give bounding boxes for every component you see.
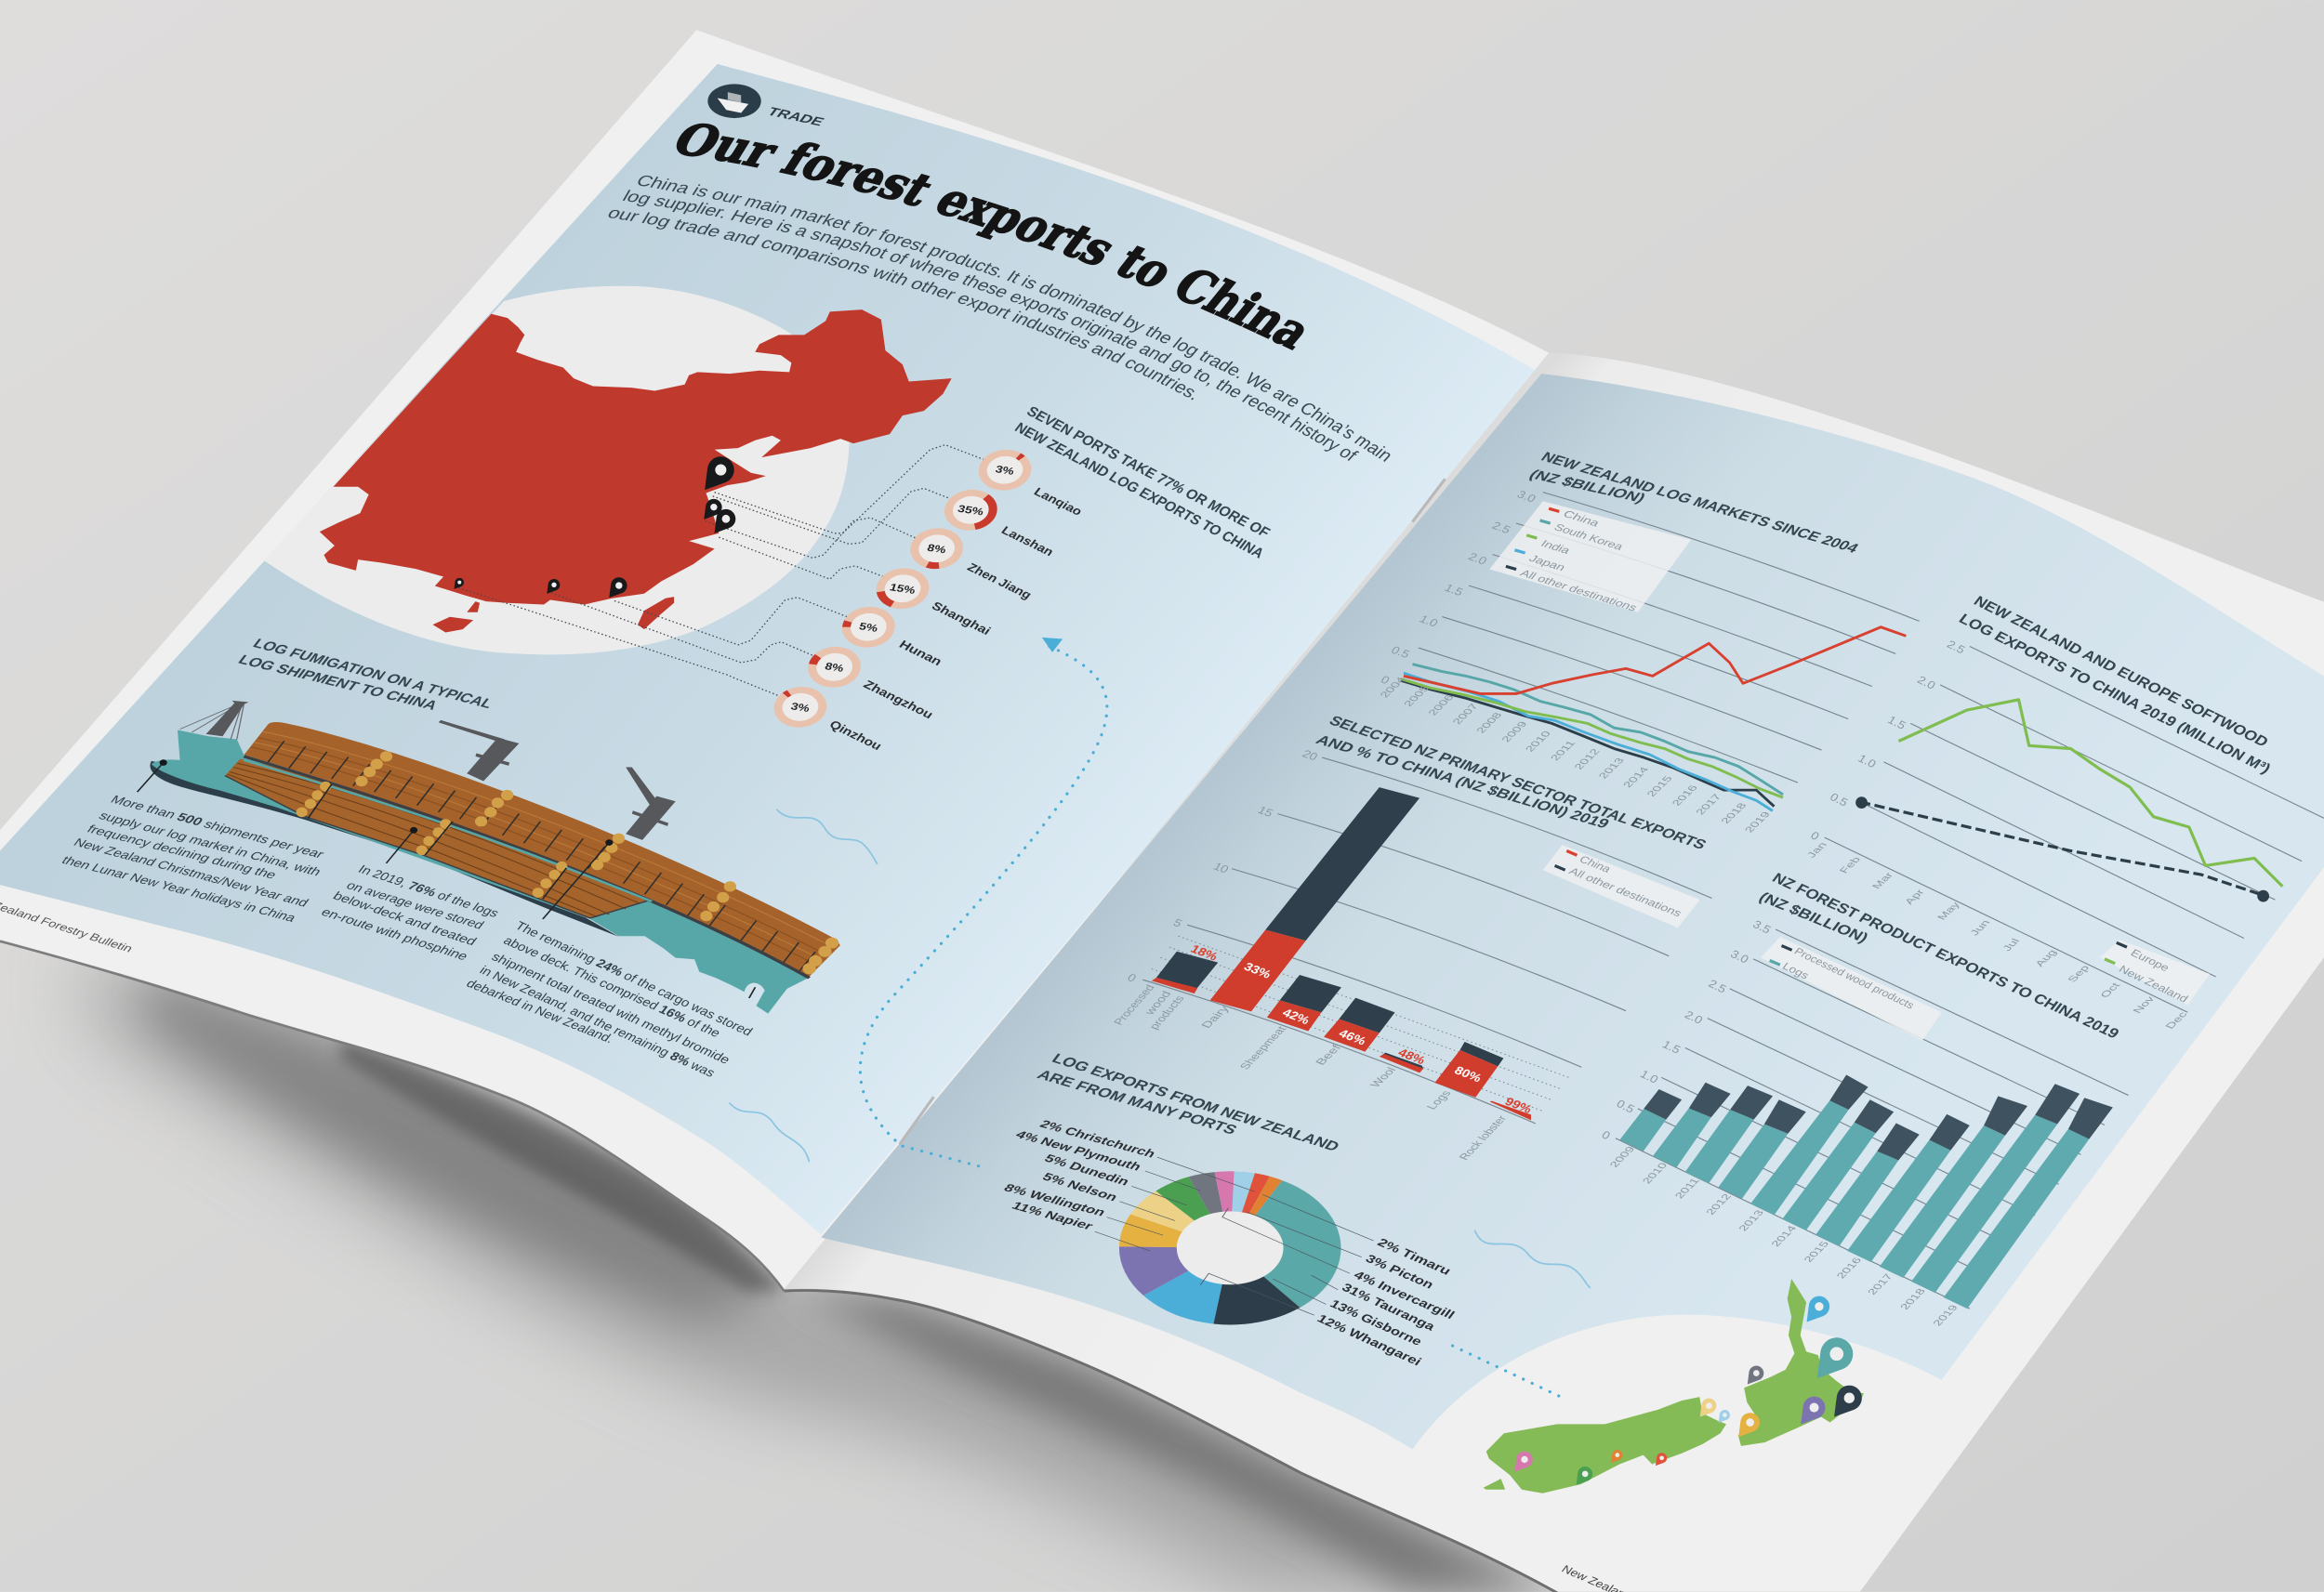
x axis years: 2008 <box>1473 711 1505 735</box>
illustration: log ship <box>138 701 840 1014</box>
left port labels: 2% Christchurch <box>1037 1118 1158 1160</box>
y axis labels: 5 <box>1171 916 1185 929</box>
label: TRADE: TRADE <box>764 105 826 129</box>
x axis years: 2016 <box>1670 783 1700 808</box>
x axis years: 2019 <box>1742 810 1773 834</box>
y axis labels: 0 <box>1125 971 1139 984</box>
right port labels: 12% Whangarei <box>1314 1312 1424 1368</box>
legend: China <box>1561 508 1603 529</box>
x axis years: 2007 <box>1450 702 1481 726</box>
title and intro, sheared along the page perspective <box>608 123 1391 462</box>
ship hull <box>152 730 809 1014</box>
gridlines <box>1616 929 2129 1309</box>
dotted routes from ports to donuts <box>456 445 984 697</box>
staples <box>900 479 1446 1144</box>
x axis years: 2015 <box>1802 1240 1831 1264</box>
y axis labels: 15 <box>1255 804 1275 820</box>
month labels: May <box>1934 900 1963 921</box>
y axis labels: 0 <box>1808 829 1822 843</box>
ship hull shadow <box>150 761 618 937</box>
x axis years: 2013 <box>1596 757 1627 780</box>
x axis years: 2014 <box>1620 766 1652 789</box>
category labels: Rock lobster <box>1457 1114 1510 1162</box>
port name labels: Shanghai <box>930 599 993 638</box>
text block: above deck: above deck. This comprised 16% of the <box>500 934 723 1040</box>
donut: Lanshan 35% <box>934 482 1008 537</box>
intro text: our log trade and comparisons with other export industries and countries. <box>608 210 1194 400</box>
y axis labels: 3.5 <box>1750 917 1774 936</box>
y axis labels: 0.5 <box>1828 790 1851 809</box>
chart title: SELECTED NZ PRIMARY SECTOR TOTAL EXPORTS <box>1326 713 1710 852</box>
month labels: Aug <box>2032 948 2059 968</box>
icons: NZ port pins <box>1514 1296 1862 1485</box>
y axis labels: 20 <box>1300 747 1320 763</box>
text block: shipments: supply our log market in China, with <box>96 809 324 879</box>
text block: shipments: then Lunar New Year holidays in China <box>59 854 299 925</box>
category labels: products <box>1147 994 1187 1031</box>
icons: China port pins <box>455 456 735 598</box>
stacked bars <box>1152 787 1531 1120</box>
bar percentages: 48% <box>1395 1046 1428 1067</box>
x axis years: 2004 <box>1378 676 1408 699</box>
y axis labels: 2.5 <box>1706 977 1729 995</box>
Stewart Island <box>1484 1479 1505 1490</box>
text block: shipments: frequency declining during the <box>84 823 279 882</box>
y axis labels: 0.5 <box>1614 1097 1637 1115</box>
leader lines <box>138 763 755 998</box>
y axis labels: 0.5 <box>1389 643 1413 661</box>
right page blue panel <box>821 374 2324 1450</box>
y axis labels: 2.5 <box>1945 638 1968 656</box>
chart: primary sector exports <box>1111 713 1712 1162</box>
port name labels: Zhangzhou <box>861 678 936 721</box>
line series <box>1401 627 1906 810</box>
gold log ends <box>297 751 838 974</box>
y axis labels: 1.0 <box>1638 1067 1661 1085</box>
port name labels: Lanshan <box>998 524 1056 559</box>
month labels: Feb <box>1837 855 1863 875</box>
y axis labels <box>1599 917 1774 1142</box>
donut: Qinzhou 3% <box>763 679 838 735</box>
heading: seven ports: SEVEN PORTS TAKE 77% OR MORE OF <box>1023 403 1274 541</box>
legend: Japan <box>1526 553 1568 573</box>
gridlines <box>1142 757 1712 1124</box>
bar percentages: 42% <box>1280 1007 1313 1027</box>
gridlines <box>1825 646 2324 1012</box>
x axis years: 2009 <box>1499 720 1530 743</box>
left port labels: 8% Wellington <box>1001 1182 1108 1218</box>
minor dotted gridlines <box>1152 936 1571 1112</box>
legend: South Korea <box>1552 521 1626 552</box>
legend: Europe <box>2128 947 2172 974</box>
chart title: NZ FOREST PRODUCT EXPORTS TO CHINA 2019 <box>1769 870 2122 1042</box>
decorative waves <box>729 809 1591 1288</box>
port name labels: Qinzhou <box>827 718 884 753</box>
y axis labels: 3.0 <box>1514 488 1538 505</box>
month labels: Mar <box>1869 871 1895 890</box>
donut: Lanqiao 3%: 3% <box>994 464 1016 477</box>
arrow: dotted blue connector <box>860 638 1107 1168</box>
category labels: Processed <box>1111 983 1157 1027</box>
month labels: Apr <box>1902 888 1927 906</box>
chart title: NEW ZEALAND AND EUROPE SOFTWOOD <box>1971 593 2272 750</box>
category labels <box>1111 983 1510 1162</box>
gridlines <box>1419 493 1920 783</box>
text block: below deck: In 2019, 76% of the logs <box>355 863 501 920</box>
crane 3 <box>626 768 676 840</box>
port name labels: Zhen Jiang <box>965 561 1034 601</box>
chart title: LOG EXPORTS TO CHINA 2019 (MILLION M³) <box>1956 611 2274 777</box>
month labels: Dec <box>2163 1010 2190 1031</box>
bar percentages: 46% <box>1337 1027 1368 1047</box>
category labels: wood <box>1142 990 1173 1017</box>
donut: Lanqiao 3% <box>970 443 1040 496</box>
deck stripes <box>244 757 810 978</box>
bar percentages: 18% <box>1188 942 1221 963</box>
category labels: Logs <box>1424 1089 1454 1112</box>
New Zealand line <box>1898 700 2282 887</box>
text block: below deck: on average were stored <box>343 879 486 932</box>
legend <box>2100 940 2210 1005</box>
x axis years: 2018 <box>1718 801 1750 825</box>
chart title: (NZ $BILLION) <box>1756 889 1871 946</box>
heading: log fumigation: LOG SHIPMENT TO CHINA <box>235 652 442 713</box>
bar percentages: 33% <box>1242 960 1274 980</box>
chart title: AND % TO CHINA (NZ $BILLION) 2019 <box>1313 732 1613 831</box>
text block: below deck: below-deck and treated <box>330 889 479 949</box>
category labels: Dairy <box>1199 1005 1232 1030</box>
category labels: Beef <box>1313 1044 1343 1067</box>
icon: trade ship badge <box>707 84 761 118</box>
panel: left page <box>0 30 1549 1291</box>
donut: Shanghai 15% <box>870 564 935 613</box>
panel: right page <box>784 353 2324 1592</box>
category labels: Sheepmeat <box>1237 1025 1288 1071</box>
month labels: Jun <box>1967 918 1993 937</box>
arrow: dotted line to NZ map <box>1452 1346 1559 1396</box>
donut: Zhangzhou 8%: 8% <box>824 661 845 675</box>
left port labels: 5% Nelson <box>1040 1171 1120 1204</box>
text block: above deck: shipment total treated with methyl bromide <box>488 951 733 1067</box>
x axis years: 2016 <box>1834 1256 1865 1280</box>
legend <box>1543 845 1700 928</box>
legend: India <box>1538 538 1573 556</box>
Europe dashed line <box>1855 796 2269 901</box>
chart: softwood log exports <box>1804 593 2324 1031</box>
text block: shipments: More than 500 shipments per year <box>108 794 326 862</box>
left port labels: 5% Dunedin <box>1042 1152 1132 1188</box>
x axis years: 2014 <box>1769 1224 1799 1248</box>
right port labels: 31% Tauranga <box>1340 1281 1438 1333</box>
month labels: Nov <box>2131 994 2158 1015</box>
text block: above deck: in New Zealand, and the remaining 8% was <box>477 964 718 1080</box>
legend <box>1761 937 1942 1041</box>
y axis labels: 1.0 <box>1855 752 1879 770</box>
intro text: China is our main market for forest products. It is dominated by the log trade. We are China’s main <box>638 175 1391 462</box>
donut: Hunan 5% <box>838 604 899 650</box>
chart title: NEW ZEALAND LOG MARKETS SINCE 2004 <box>1538 449 1862 556</box>
text block: above deck <box>463 919 755 1080</box>
y axis labels <box>1808 638 1968 843</box>
intro text: log supplier. Here is a snapshot of where these exports originate and go to, the recent history of <box>623 190 1359 461</box>
port name labels <box>827 485 1085 753</box>
y axis labels: 1.5 <box>1660 1037 1684 1056</box>
donut wedges <box>1095 1157 1374 1324</box>
y axis labels: 3.0 <box>1728 947 1751 966</box>
heading: seven ports: NEW ZEALAND LOG EXPORTS TO CHINA <box>1011 419 1267 561</box>
category labels: Wool <box>1367 1066 1398 1089</box>
bar percentages <box>1188 942 1535 1115</box>
map: China <box>320 309 952 632</box>
y axis labels <box>1125 747 1320 984</box>
y axis labels: 1.5 <box>1442 581 1466 599</box>
left page blue panel <box>0 64 1541 1234</box>
text block: above deck: The remaining 24% of the cargo was stored <box>512 919 755 1039</box>
left port labels <box>1001 1118 1158 1232</box>
legend: All other destinations <box>1566 865 1684 919</box>
x axis years <box>1378 676 1773 834</box>
donut: Shanghai 15%: 15% <box>888 582 917 597</box>
text block: shipments <box>59 794 326 925</box>
right port labels <box>1314 1236 1458 1368</box>
x axis years: 2010 <box>1523 730 1553 753</box>
x axis years: 2019 <box>1930 1303 1961 1327</box>
text block: below deck <box>318 863 501 964</box>
legend: Processed wood products <box>1791 945 1917 1011</box>
right port labels: 2% Timaru <box>1375 1236 1454 1277</box>
donut: Hunan 5%: 5% <box>858 621 879 634</box>
month labels: Oct <box>2098 981 2123 999</box>
chart title: ARE FROM MANY PORTS <box>1034 1067 1240 1138</box>
x axis years: 2010 <box>1640 1161 1670 1185</box>
y axis labels: 2.5 <box>1489 519 1513 536</box>
x axis years: 2005 <box>1401 684 1433 708</box>
legend: New Zealand <box>2117 963 2190 1005</box>
legend <box>1489 501 1691 613</box>
donut: Zhen Jiang 8% <box>903 523 971 573</box>
x axis years: 2015 <box>1644 774 1675 798</box>
y axis labels <box>1379 488 1538 687</box>
x axis years: 2012 <box>1703 1192 1734 1217</box>
text block: above deck: debarked in New Zealand. <box>463 978 616 1046</box>
left port labels: 11% Napier <box>1010 1200 1097 1232</box>
x axis years: 2017 <box>1865 1272 1895 1296</box>
text block: shipments: New Zealand Christmas/New Year and <box>71 836 311 910</box>
leader lines <box>1095 1157 1374 1315</box>
chart: New Zealand log markets <box>1378 449 1920 834</box>
port name labels: Lanqiao <box>1032 485 1085 518</box>
x axis years: 2013 <box>1736 1208 1766 1232</box>
y axis labels: 10 <box>1211 860 1232 875</box>
chart title: LOG EXPORTS FROM NEW ZEALAND <box>1049 1051 1342 1154</box>
map: New Zealand <box>1484 1279 1864 1493</box>
y axis labels: 1.5 <box>1885 713 1908 731</box>
upper deck logs <box>244 722 840 977</box>
bar percentages: 99% <box>1502 1095 1535 1115</box>
y axis labels: 1.0 <box>1417 612 1441 629</box>
port name labels: Hunan <box>896 638 944 668</box>
right port labels: 3% Picton <box>1363 1252 1436 1291</box>
x axis years <box>1607 1145 1961 1327</box>
x axis years: 2018 <box>1897 1287 1928 1311</box>
x axis years: 2009 <box>1607 1145 1638 1169</box>
bar percentages: 80% <box>1452 1064 1485 1085</box>
x axis years: 2011 <box>1548 739 1578 762</box>
month labels: Sep <box>2065 964 2093 983</box>
y axis labels: 0 <box>1599 1128 1613 1142</box>
x axis years: 2006 <box>1425 693 1457 717</box>
text block: below deck: en-route with phosphine <box>318 906 470 964</box>
donut: Lanshan 35%: 35% <box>957 503 985 518</box>
x axis years: 2012 <box>1572 747 1603 771</box>
y axis labels: 2.0 <box>1915 673 1938 691</box>
x axis years: 2017 <box>1693 793 1724 816</box>
donut: Zhen Jiang 8%: 8% <box>926 542 947 556</box>
title: Our forest exports to China <box>677 123 1304 350</box>
month labels <box>1804 841 2190 1031</box>
month labels: Jan <box>1804 841 1829 859</box>
heading: log fumigation: LOG FUMIGATION ON A TYPICAL <box>250 636 496 711</box>
crane 2 <box>439 720 519 782</box>
chart: forest product exports <box>1599 870 2129 1327</box>
lower hold logs <box>225 759 652 918</box>
month labels: Jul <box>2000 937 2022 953</box>
right port labels: 13% Gisborne <box>1327 1297 1425 1349</box>
legend: All other destinations <box>1518 568 1640 613</box>
South Island <box>1486 1397 1726 1493</box>
legend: China <box>1577 853 1614 875</box>
x axis years: 2011 <box>1672 1177 1702 1200</box>
y axis labels: 2.0 <box>1683 1008 1705 1027</box>
page shadow <box>89 949 1558 1592</box>
white circle behind China map <box>264 286 850 654</box>
stacked bars <box>1619 1074 2113 1309</box>
legend: Logs <box>1780 960 1812 981</box>
y axis labels: 0 <box>1379 673 1393 687</box>
North Island <box>1738 1279 1864 1446</box>
left port labels: 4% New Plymouth <box>1013 1128 1144 1173</box>
front mast <box>180 701 249 740</box>
donut: Qinzhou 3%: 3% <box>789 701 812 715</box>
chart: log export ports donut <box>1001 1051 1458 1368</box>
donut: Zhangzhou 8% <box>808 647 862 687</box>
right port labels: 4% Invercargill <box>1351 1269 1458 1322</box>
chart title: (NZ $BILLION) <box>1526 467 1649 506</box>
leader dots <box>160 759 613 846</box>
y axis labels: 2.0 <box>1466 550 1489 567</box>
